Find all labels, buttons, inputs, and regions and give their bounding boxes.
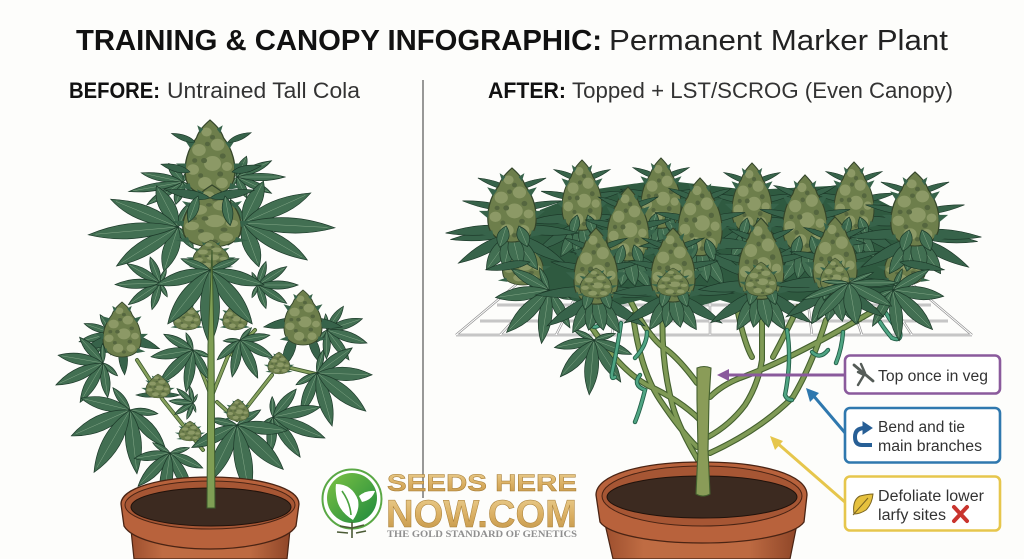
callout: defoliate lower larfy sites: [845, 476, 1000, 530]
callout: top once in veg: Top once in veg: [878, 368, 988, 385]
before plant small buds: [136, 352, 294, 441]
heading: after: AFTER:: [488, 78, 566, 103]
outer colas: [445, 168, 982, 285]
scrog grid: [456, 278, 972, 335]
callout: bend and tie main branches: [845, 408, 1000, 462]
callout: defoliate lower larfy sites: larfy sites: [878, 507, 946, 524]
green ties: [587, 313, 900, 422]
logo: seeds here now: [322, 470, 577, 540]
before plant top cola: [160, 120, 262, 270]
icon: yellow leaf: [853, 494, 873, 515]
logo wordmark: SEEDS HERE: [387, 470, 577, 497]
logo: seeds here now: THE GOLD STANDARD OF GENETICS: [387, 530, 577, 540]
arrow: purple to topped stub: [717, 369, 844, 381]
trained branches: [590, 300, 875, 460]
before plant main stem: [207, 250, 215, 508]
back row colas: [527, 158, 909, 263]
heading: before: Untrained Tall Cola: [167, 78, 361, 103]
before plant lower leaves: [41, 255, 392, 509]
before plant side buds: [83, 290, 343, 375]
title: Permanent Marker Plant: [609, 25, 948, 57]
arrow: blue to branches: [806, 388, 846, 434]
center divider: [422, 80, 424, 498]
icon: bend arrow: [855, 422, 872, 445]
middle row colas: [570, 175, 866, 292]
before plant upper leaves: [74, 156, 376, 370]
title: [76, 25, 948, 57]
callout: bend and tie main branches: main branches: [878, 438, 982, 455]
callout: bend and tie main branches: Bend and tie: [878, 419, 965, 436]
front row colas: [535, 217, 896, 336]
before plant pot: [121, 477, 299, 559]
title: TRAINING & CANOPY INFOGRAPHIC:: [76, 25, 602, 57]
heading: before: [69, 78, 361, 103]
callout: top once in veg: [845, 356, 1000, 394]
main trunk, topped stub: [696, 366, 711, 496]
lower fan leaf: [549, 326, 635, 398]
canopy fan leaves: [476, 251, 962, 363]
canopy mass: [522, 180, 912, 312]
after plant pot: [596, 462, 807, 559]
icon: pruning shears: [854, 364, 873, 385]
logo mark: [322, 470, 382, 538]
before plant branches: [137, 330, 320, 450]
icon: red x: [954, 507, 967, 521]
heading: after: Topped + LST/SCROG (Even Canopy): [572, 78, 953, 103]
callout: defoliate lower larfy sites: Defoliate lower: [878, 488, 984, 505]
panel: before plant: [41, 120, 392, 559]
heading: before: BEFORE:: [69, 78, 160, 103]
front canopy fan leaf: [798, 266, 906, 333]
logo: seeds here now: NOW.COM: [386, 493, 577, 536]
arrow: yellow to lower sites: [770, 436, 846, 503]
panel: after plant: [445, 158, 982, 559]
